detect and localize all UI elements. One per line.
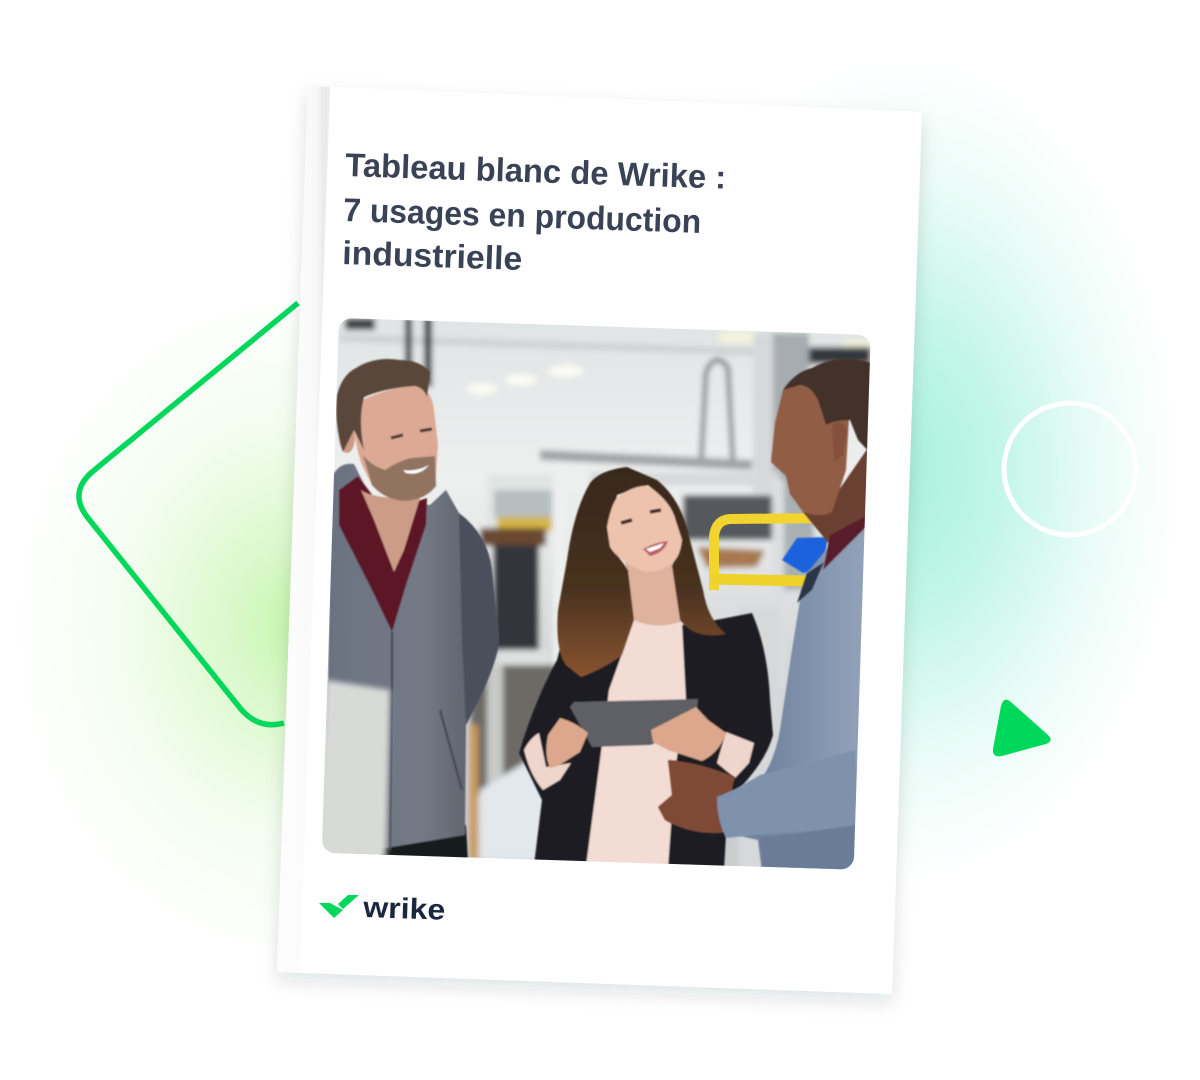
outline rounded diamond bbox=[79, 303, 298, 725]
jacket shoulder shading bbox=[459, 513, 499, 725]
ear bbox=[832, 422, 847, 462]
face bbox=[354, 386, 439, 484]
left sleeve bbox=[524, 733, 571, 790]
jacket pocket bbox=[440, 710, 462, 790]
photo: three colleagues in a factory bbox=[310, 310, 880, 880]
background glow: green left bbox=[0, 270, 330, 990]
lower jacket shading bbox=[760, 825, 856, 872]
mouth bbox=[643, 541, 668, 556]
burgundy polo bbox=[339, 476, 427, 632]
grey jacket bbox=[328, 462, 476, 849]
trousers bbox=[380, 825, 468, 862]
hair bbox=[557, 467, 726, 677]
foreground machine bbox=[318, 680, 390, 858]
person: man on the left bbox=[326, 359, 499, 862]
logo check mark bbox=[319, 895, 359, 918]
book page bbox=[277, 86, 922, 994]
background glow: mint right bbox=[600, 50, 1200, 900]
tablet bbox=[570, 699, 698, 747]
blue sleeve bbox=[717, 750, 860, 838]
white circle outline bbox=[1004, 403, 1136, 535]
person: man on the right bbox=[658, 359, 872, 880]
eyes and smile bbox=[391, 429, 432, 438]
blouse bbox=[586, 620, 686, 868]
dark collar lining bbox=[797, 562, 824, 603]
left hand bbox=[546, 718, 588, 768]
beard bbox=[363, 455, 436, 501]
title: industrielle bbox=[342, 234, 523, 277]
yellow rack bbox=[714, 518, 834, 590]
logo wordmark: wrike bbox=[362, 892, 446, 927]
eyes bbox=[621, 510, 661, 523]
wrike logo bbox=[319, 892, 446, 927]
person: woman in the centre bbox=[519, 467, 773, 870]
green triangle bbox=[993, 700, 1051, 756]
hair bbox=[783, 359, 872, 455]
hair bbox=[336, 359, 430, 452]
burgundy collar bbox=[823, 516, 866, 570]
ear bbox=[338, 430, 356, 454]
blue bin bbox=[782, 537, 828, 573]
book bbox=[277, 86, 922, 994]
face bbox=[607, 486, 682, 572]
neck bbox=[361, 490, 420, 572]
zip bbox=[390, 632, 392, 850]
infographic: book cover mockup bbox=[68, 86, 1148, 1007]
right sleeve bbox=[717, 732, 754, 778]
title bbox=[342, 146, 727, 277]
photo background: factory interior bbox=[310, 310, 880, 880]
clasped hands bbox=[658, 760, 735, 833]
black blazer bbox=[519, 613, 773, 870]
face bbox=[771, 375, 850, 515]
blue jacket bbox=[722, 528, 864, 867]
book spine bbox=[277, 86, 330, 973]
right hand bbox=[651, 707, 726, 761]
title: 7 usages en production bbox=[343, 191, 702, 240]
title: Tableau blanc de Wrike : bbox=[345, 146, 727, 196]
neck bbox=[803, 445, 870, 545]
yellow rack lower bar bbox=[712, 579, 806, 581]
neck bbox=[625, 560, 680, 626]
